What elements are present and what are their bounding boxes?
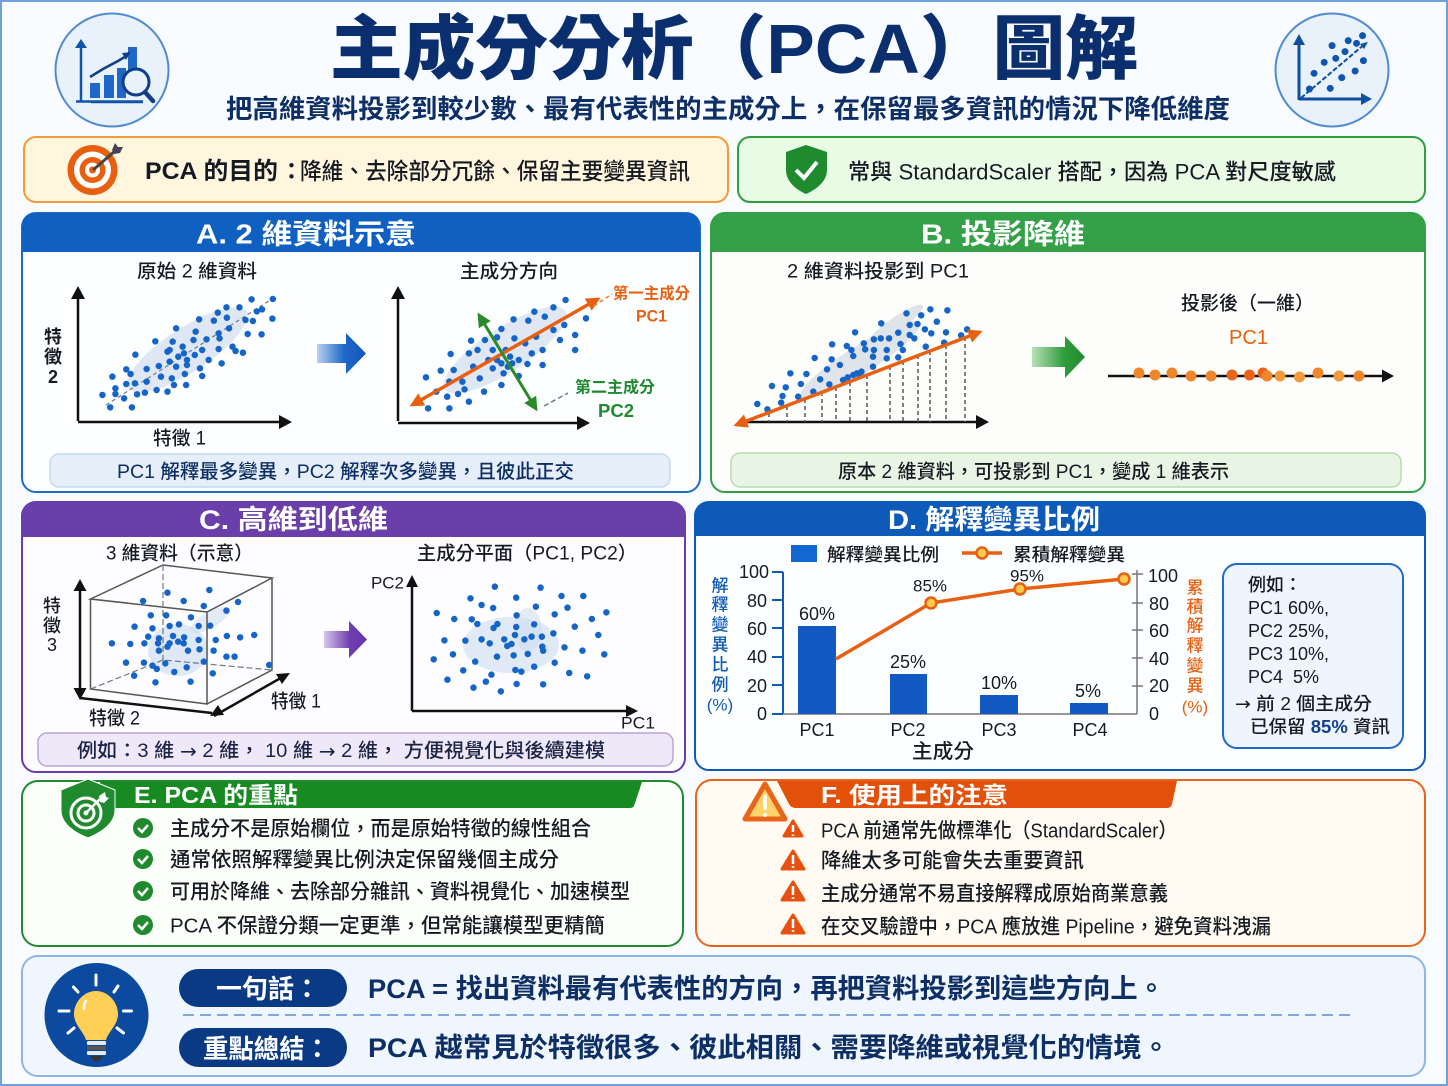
left axis: 60: [747, 619, 767, 639]
y label left: (%): [707, 696, 733, 714]
original data title: 原始 2 維資料: [137, 260, 257, 282]
label: PC2: PC2: [598, 401, 634, 421]
icon: chart with magnifier: [56, 14, 168, 126]
bar value labels: 10%: [981, 673, 1017, 693]
label: PC1: 第一主成分: [613, 284, 690, 302]
y label right: 變: [1186, 656, 1204, 676]
panel D heading: D. 解釋變異比例: [888, 505, 1100, 535]
chart: projection onto PC1: [736, 300, 989, 429]
axis label: feature 2: 2: [48, 367, 58, 387]
arrow: PC2: [479, 315, 536, 409]
legend: 累積解釋變異: [1013, 545, 1125, 565]
plane title: 主成分平面（PC1, PC2）: [417, 542, 637, 564]
example box: PC3 10%,: [1248, 644, 1329, 664]
purpose text: 降維、去除部分冗餘、保留主要變異資訊: [300, 158, 701, 184]
left axis: 80: [747, 591, 767, 611]
y label left: 解: [712, 576, 728, 596]
y label right: 累: [1186, 578, 1204, 598]
direction title: 主成分方向: [460, 260, 558, 282]
label pill: one sentence: 一句話：: [216, 974, 320, 1004]
panel B heading: B. 投影降維: [921, 218, 1085, 250]
callout: StandardScaler note: [738, 137, 1425, 202]
arrow: blue: [317, 333, 366, 374]
right axis: 80: [1149, 594, 1169, 614]
left axis: 20: [747, 676, 767, 696]
bar value labels: 5%: [1075, 681, 1101, 701]
caution 4: 在交叉驗證中，PCA 應放進 Pipeline，避免資料洩漏: [821, 914, 1271, 938]
caution 1: PCA 前通常先做標準化（StandardScaler）: [821, 820, 1177, 842]
label: PC1: PC1: [636, 306, 667, 326]
left axis: 40: [747, 647, 767, 667]
example box: PC1 60%,: [1248, 598, 1329, 618]
caution 3: 主成分通常不易直接解釋成原始商業意義: [821, 882, 1168, 906]
axis label: feature 2: 徵: [44, 347, 62, 367]
point 3: 可用於降維、去除部分雜訊、資料視覺化、加速模型: [170, 880, 630, 904]
caption A: [50, 454, 670, 487]
y label right: 釋: [1186, 636, 1204, 656]
arrow: green: [1032, 336, 1085, 378]
axis label: feature 3: [43, 596, 61, 655]
axis label: feature 2: 特徵 2: [89, 708, 140, 730]
arrow: purple: [324, 621, 367, 658]
icon: shield target: [61, 779, 115, 838]
axis label: feature 3: 3: [47, 635, 57, 655]
y label left: [707, 576, 733, 714]
y label left: 變: [712, 614, 728, 634]
y label left: 釋: [712, 596, 728, 614]
point 2: 通常依照解釋變異比例決定保留幾個主成分: [170, 848, 559, 872]
y label right: [1182, 578, 1208, 716]
y label right: 積: [1186, 598, 1204, 616]
arrow: PC1 line: [736, 332, 980, 425]
right axis: 40: [1149, 649, 1169, 669]
example box: [1223, 564, 1403, 748]
panel C: high to low dimension: [22, 502, 685, 772]
combo chart: [739, 562, 1178, 763]
label pill: key summary: 重點總結：: [203, 1034, 330, 1064]
panel B header: [711, 213, 1425, 252]
legend: [791, 545, 1125, 565]
purpose text: PCA 的目的: [145, 158, 278, 184]
panel D: explained variance: [695, 502, 1425, 770]
note text: 常與 StandardScaler 搭配，因為 PCA 對尺度敏感: [848, 160, 1336, 184]
scatter chart: principal directions: [391, 286, 612, 430]
x axis title: 主成分: [912, 740, 974, 763]
title: 主成分分析（PCA）圖解: [330, 10, 1138, 88]
right axis: 100: [1148, 566, 1178, 586]
label: PC1: [613, 284, 690, 326]
example box: → 前 2 個主成分: [1235, 694, 1372, 714]
panel F heading: F. 使用上的注意: [821, 782, 1008, 808]
category labels: PC3: [981, 720, 1017, 740]
label: PC1: PC1: [1229, 327, 1268, 349]
subtitle: 把高維資料投影到較少數、最有代表性的主成分上，在保留最多資訊的情況下降低維度: [226, 94, 1230, 124]
cumulative line: 85%: [913, 576, 947, 596]
label pill: key summary: [179, 1028, 347, 1067]
y label left: 比: [712, 656, 728, 674]
category labels: [799, 720, 1108, 740]
label pill: one sentence: [179, 969, 347, 1007]
3D title: 3 維資料（示意）: [106, 542, 253, 564]
point 1: 主成分不是原始欄位，而是原始特徵的線性組合: [170, 818, 591, 840]
caption B: 原本 2 維資料，可投影到 PC1，變成 1 維表示: [838, 461, 1229, 483]
bar value labels: 60%: [799, 604, 835, 624]
axis label: feature 1: 特徵 1: [271, 690, 321, 712]
y label right: 解: [1186, 616, 1204, 636]
caption C: [38, 733, 673, 766]
right axis: 60: [1149, 621, 1169, 641]
left axis: 0: [757, 704, 767, 724]
icon: light bulb: [44, 963, 148, 1067]
label: PC2: [575, 378, 655, 421]
left axis: 100: [739, 562, 769, 582]
right axis: 20: [1149, 676, 1169, 696]
left axis: [739, 562, 783, 724]
right axis: [783, 566, 1178, 724]
category labels: PC4: [1072, 720, 1108, 740]
chart: 3D cube scatter: [74, 565, 290, 716]
example box: 已保留 85% 資訊: [1250, 717, 1390, 737]
bars: [798, 626, 1108, 714]
panel C heading: C. 高維到低維: [199, 505, 388, 535]
axis label: PC1: PC1: [621, 714, 655, 732]
icon: large warning: [745, 784, 785, 819]
projection title: 2 維資料投影到 PC1: [787, 260, 969, 282]
panel E ribbon: [100, 782, 642, 808]
axis label: feature 2: 特: [44, 327, 62, 347]
cumulative line: [836, 566, 1130, 659]
y label left: 異: [712, 636, 728, 654]
axis label: feature 2: [44, 327, 62, 387]
scatter chart: original data: [71, 286, 292, 429]
panel A heading: A. 2 維資料示意: [196, 218, 416, 250]
icon: target with dart: [68, 143, 123, 195]
bar value labels: [799, 604, 1101, 701]
panel D header: [695, 502, 1425, 536]
cumulative line: 95%: [1010, 566, 1044, 586]
caution 2: 降維太多可能會失去重要資訊: [821, 850, 1084, 872]
point 4: PCA 不保證分類一定更準，但常能讓模型更精簡: [170, 914, 605, 938]
category labels: PC2: [890, 720, 926, 740]
panel F: cautions: [696, 780, 1425, 946]
caption C: 例如：3 維 → 2 維， 10 維 → 2 維， 方便視覺化與後續建模: [77, 739, 605, 762]
icon: shield check: [786, 145, 827, 194]
category labels: PC1: [799, 720, 835, 740]
projected title: 投影後（一維）: [1181, 292, 1314, 314]
chart: PC1-PC2 plane: [406, 575, 638, 717]
panel A header: [22, 213, 700, 252]
panel F ribbon: [777, 781, 1177, 808]
icon: scatter plot with trend: [1276, 14, 1388, 126]
caption A: PC1 解釋最多變異，PC2 解釋次多變異，且彼此正交: [117, 461, 574, 483]
panel E heading: E. PCA 的重點: [134, 782, 298, 808]
bar value labels: 25%: [890, 652, 926, 672]
label: PC2: 第二主成分: [575, 378, 655, 396]
panel: summary: [22, 956, 1425, 1076]
caption B: [731, 453, 1401, 487]
axis label: feature 3: 徵: [43, 616, 61, 636]
axis label: feature 3: 特: [43, 596, 61, 616]
purpose text: ：: [280, 158, 303, 184]
callout: PCA purpose: [24, 137, 728, 202]
panel A: 2D data: [22, 213, 700, 492]
panel B: projection: [711, 213, 1425, 492]
panel C header: [22, 502, 685, 537]
axis label: PC2: PC2: [371, 574, 404, 592]
right axis: 0: [1149, 704, 1159, 724]
key summary text: PCA 越常見於特徵很多 、彼此相關、需要降維或視覺化的情境 。: [368, 1033, 1170, 1063]
y label left: 例: [712, 676, 728, 694]
y label right: 異: [1186, 676, 1204, 696]
panel E: key points: [22, 779, 683, 946]
axis label: feature 1: 特徵 1: [153, 428, 206, 450]
example box: 例如：: [1248, 575, 1302, 595]
example box: PC2 25%,: [1248, 621, 1329, 641]
chart: 1D projected points: [1108, 368, 1394, 382]
legend: 解釋變異比例: [827, 545, 939, 565]
arrow: PC1: [412, 299, 598, 405]
y label right: (%): [1182, 698, 1208, 716]
example box: PC4 5%: [1248, 667, 1319, 687]
one-sentence text: PCA = 找出資料最有代表性的方向，再把資料投影到這些方向上。: [368, 973, 1165, 1004]
